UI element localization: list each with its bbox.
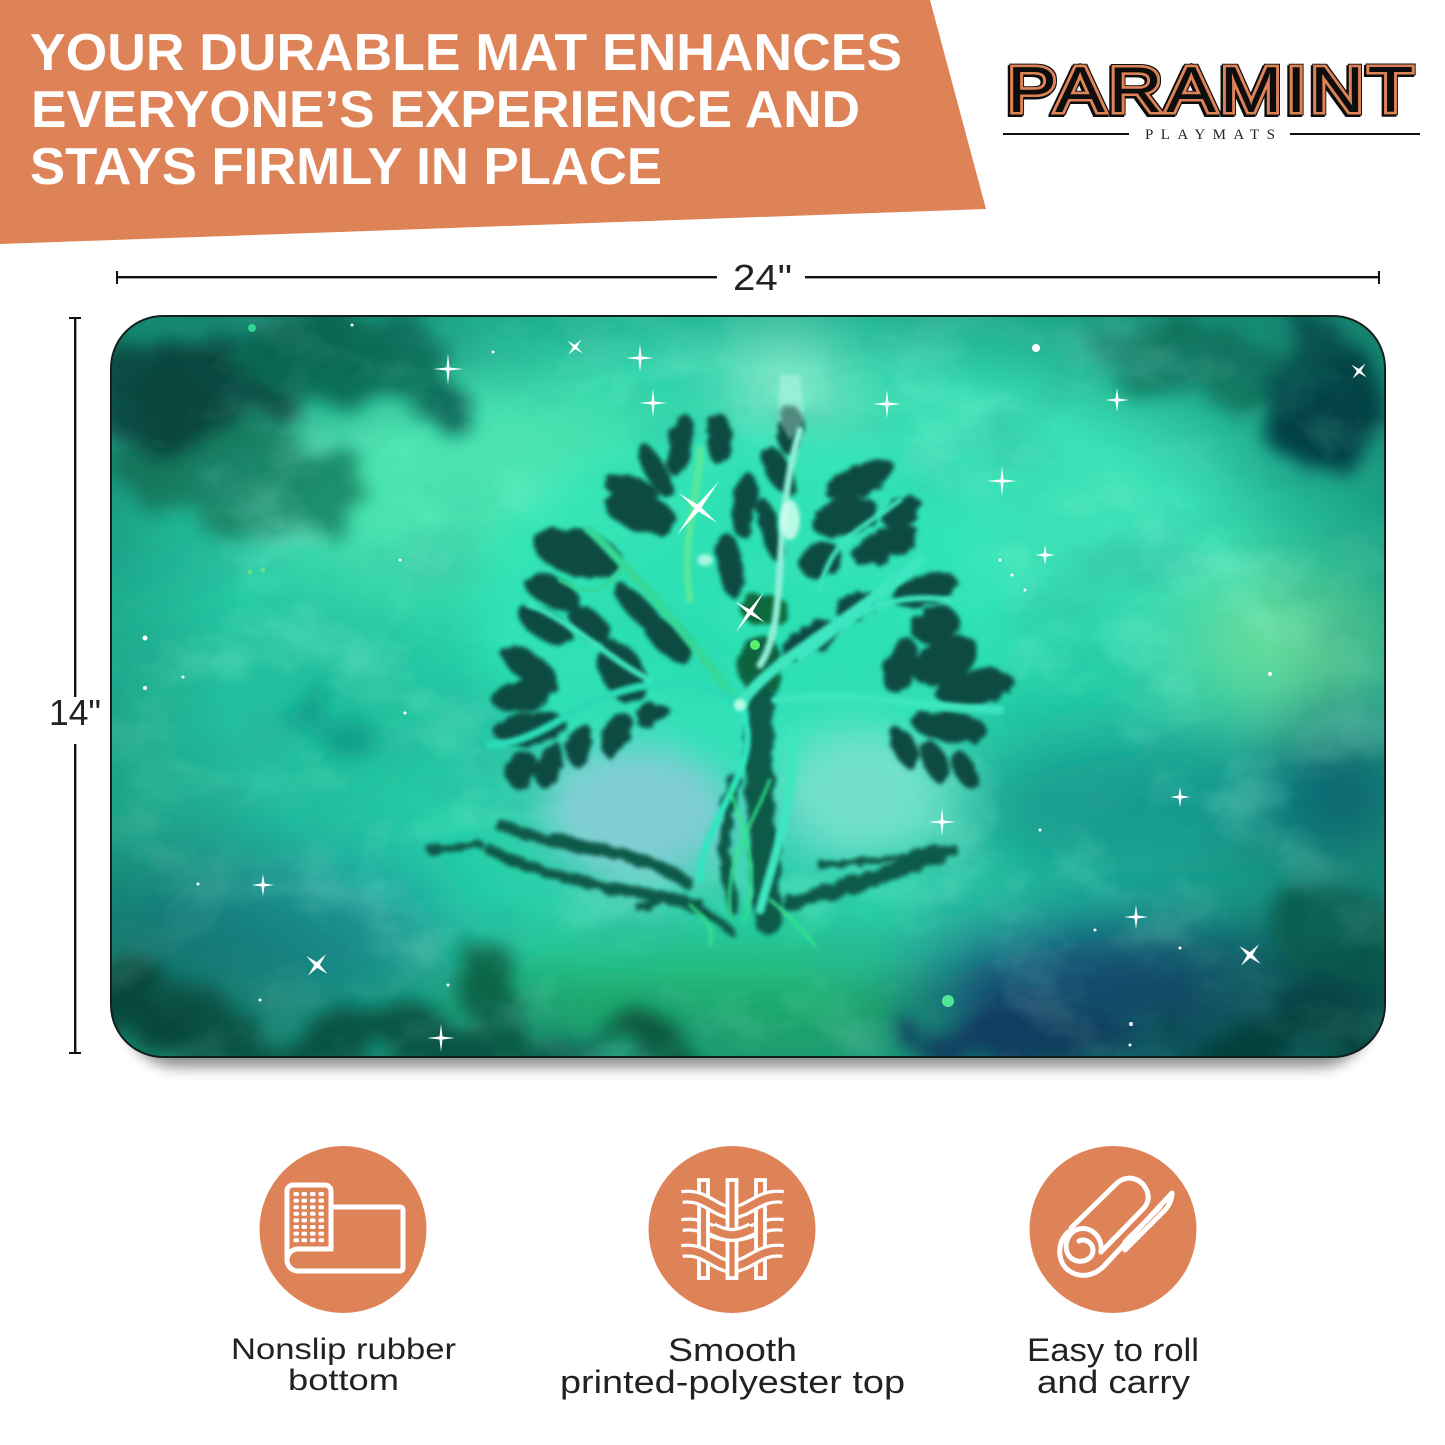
- heading banner: [0, 0, 986, 244]
- mat shadow: [125, 335, 1371, 1067]
- width dimension: 24 inches: 24": [733, 257, 792, 298]
- feature: easy to roll and carry: [1027, 1146, 1199, 1400]
- icon: rubber mat with textured corner: [260, 1146, 426, 1313]
- label: smooth printed-polyester top: printed-polyester top: [560, 1364, 905, 1400]
- lavender glow beneath canopy: [555, 730, 935, 872]
- nebula background: [112, 317, 1384, 1056]
- feature: nonslip rubber bottom: [231, 1146, 456, 1397]
- cloud texture: [111, 316, 1385, 1057]
- label: easy to roll and carry: [1027, 1332, 1199, 1400]
- label: smooth printed-polyester top: [560, 1332, 905, 1400]
- tree branches: [490, 430, 1000, 945]
- label: easy to roll and carry: and carry: [1037, 1364, 1190, 1400]
- label: nonslip rubber bottom: Nonslip rubber: [231, 1333, 456, 1366]
- icon: rolled mat: [1030, 1146, 1196, 1313]
- bright patches in canopy: [697, 375, 805, 711]
- playmat artwork: [110, 315, 1386, 1058]
- icon: woven fabric: [648, 1146, 816, 1313]
- height dimension: 14 inches: 14": [49, 692, 101, 733]
- sparkle stars: [142, 324, 1373, 1052]
- canopy glow: [475, 425, 1015, 795]
- heading banner: EVERYONE’S EXPERIENCE AND: [31, 81, 860, 139]
- feature: smooth printed-polyester top: [560, 1146, 905, 1400]
- heading banner: STAYS FIRMLY IN PLACE: [30, 138, 662, 196]
- label: easy to roll and carry: Easy to roll: [1027, 1332, 1199, 1368]
- tree trunk and roots: [430, 700, 950, 930]
- logo: Paramint Playmats: [1003, 53, 1420, 143]
- heading banner: YOUR DURABLE MAT ENHANCES: [30, 24, 902, 82]
- label: nonslip rubber bottom: [231, 1333, 456, 1397]
- tree canopy leaves: [495, 409, 1013, 789]
- logo: Paramint Playmats: PLAYMATS: [1145, 127, 1275, 143]
- logo: Paramint Playmats: PARAMINT: [1007, 53, 1417, 126]
- tree: [430, 375, 1015, 945]
- label: nonslip rubber bottom: bottom: [288, 1364, 399, 1397]
- label: smooth printed-polyester top: Smooth: [668, 1332, 797, 1368]
